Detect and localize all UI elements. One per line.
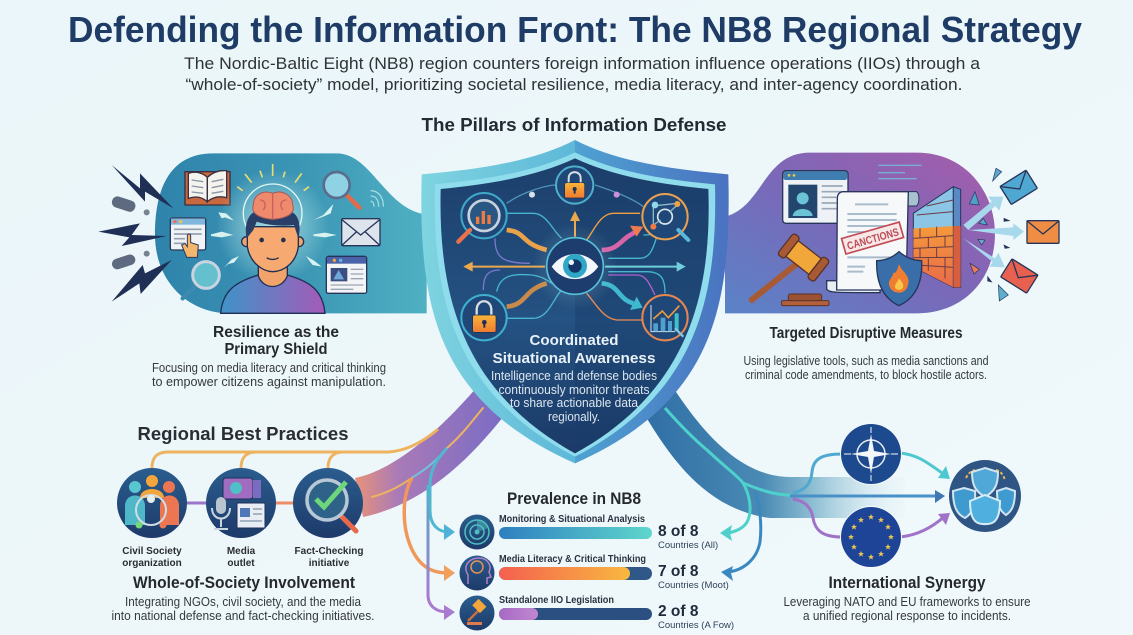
whole of society description: into national defense and fact-checking initiatives. xyxy=(112,608,374,623)
bar: monitoring: Monitoring & Situational Analysis xyxy=(499,514,645,525)
icon: person with brain xyxy=(221,192,325,313)
icon: NATO xyxy=(840,423,902,485)
icon: glowing halo and rays xyxy=(216,164,329,283)
icon: blue envelope xyxy=(1000,170,1037,205)
bar: media literacy: Media Literacy & Critical Thinking xyxy=(499,554,646,565)
icon: top padlock xyxy=(556,166,593,204)
icon: magnifier right xyxy=(324,172,359,208)
bar: media literacy: 7 of 8 xyxy=(658,563,699,580)
icon: red envelope xyxy=(1001,259,1038,293)
icon: flame shield xyxy=(877,252,922,306)
international synergy description xyxy=(784,594,1030,623)
heading: regional best practices: Regional Best Practices xyxy=(138,423,348,444)
labels: organisations: Fact-Checking xyxy=(295,546,363,557)
labels: organisations: Media xyxy=(227,546,256,557)
resilience description: Focusing on media literacy and critical thinking xyxy=(152,360,386,375)
title: Defending the Information Front: The NB8 Regional Strategy xyxy=(68,9,1082,50)
bar: media literacy xyxy=(460,554,729,591)
labels: organisations: Civil Society xyxy=(122,546,182,557)
bar: legislation: Countries (A Fow) xyxy=(658,620,734,631)
shield heading xyxy=(492,332,656,367)
heading: resilience xyxy=(213,324,339,358)
icon: gavel xyxy=(752,233,830,306)
bar: legislation: 2 of 8 xyxy=(658,603,699,620)
intro text: The Nordic-Baltic Eight (NB8) region counters foreign information influence operations (IIOs) through a xyxy=(184,55,981,73)
bar: legislation: Standalone IIO Legislation xyxy=(499,595,614,606)
circle: media outlet xyxy=(206,468,276,538)
heading: prevalence: Prevalence in NB8 xyxy=(507,489,641,508)
heading: pillars: The Pillars of Information Defense xyxy=(422,115,726,135)
icon: sanctions scroll xyxy=(827,192,919,293)
targeted measures description xyxy=(744,353,988,382)
panel: resilience illustration xyxy=(98,153,427,313)
shield heading: Situational Awareness xyxy=(492,350,656,367)
chart: prevalence in NB8 xyxy=(460,514,734,631)
icon: EU xyxy=(840,506,902,568)
resilience description: to empower citizens against manipulation. xyxy=(152,374,386,389)
icon: network search xyxy=(642,194,688,240)
shield: coordinated situational awareness xyxy=(421,140,729,463)
bar: monitoring xyxy=(460,514,718,551)
international synergy description: Leveraging NATO and EU frameworks to ensure xyxy=(784,594,1030,609)
shield description: to share actionable data xyxy=(510,396,638,410)
icon: profile browser xyxy=(783,171,848,223)
icon: envelope xyxy=(342,219,380,246)
arrows in network xyxy=(463,211,686,310)
shards xyxy=(969,168,1009,301)
labels: organisations: outlet xyxy=(227,558,255,569)
shield heading: Coordinated xyxy=(530,332,618,349)
icon: magnifier left xyxy=(183,262,219,298)
arrows around head xyxy=(211,204,337,267)
shield description: Intelligence and defense bodies xyxy=(491,369,657,383)
network lines xyxy=(483,185,665,320)
ribbon: left band to best practices xyxy=(355,387,503,517)
shield description: continuously monitor threats xyxy=(498,383,650,397)
targeted measures description: Using legislative tools, such as media sanctions and xyxy=(744,353,988,368)
icon: analysis magnifier xyxy=(458,193,507,242)
heading: international synergy: International Synergy xyxy=(828,574,986,592)
labels: organisations: initiative xyxy=(309,558,350,569)
decorative list lines xyxy=(878,165,922,179)
heading: resilience: Primary Shield xyxy=(224,341,328,358)
arrows: blocked messages xyxy=(963,197,1024,267)
bar: legislation xyxy=(460,595,734,631)
connectors: best practices xyxy=(152,408,483,503)
whole of society description: Integrating NGOs, civil society, and the media xyxy=(125,594,362,609)
intro text: “whole-of-society” model, prioritizing societal resilience, media literacy, and inter-agency coordination. xyxy=(186,76,962,94)
labels: organisations: organization xyxy=(122,558,182,569)
icon: wifi signal xyxy=(371,191,383,207)
icon: allied shields xyxy=(949,460,1021,532)
stamp text: CANCTIONS xyxy=(846,226,900,253)
intro text xyxy=(184,55,981,94)
heading: whole of society: Whole-of-Society Involvement xyxy=(133,574,355,592)
connectors: to prevalence chart xyxy=(404,408,761,620)
shield description: regionally. xyxy=(548,410,600,424)
circle: civil society xyxy=(117,468,187,538)
international synergy description: a unified regional response to incidents. xyxy=(803,608,1011,623)
labels: organisations xyxy=(122,546,363,569)
heading: resilience: Resilience as the xyxy=(213,324,339,341)
icon: central eye xyxy=(532,223,618,310)
icon: trend chart xyxy=(642,295,688,340)
targeted measures description: criminal code amendments, to block hostile actors. xyxy=(745,367,987,382)
icon: side padlock xyxy=(461,295,507,340)
icon: brick firewall xyxy=(913,187,961,287)
shield description xyxy=(491,369,657,424)
heading: targeted measures: Targeted Disruptive Measures xyxy=(770,325,963,342)
icon: browser window xyxy=(326,256,367,293)
bar: monitoring: 8 of 8 xyxy=(658,523,699,540)
icon: attack bolts xyxy=(98,165,173,302)
bar: media literacy: Countries (Moot) xyxy=(658,580,729,591)
icon: open book xyxy=(185,171,230,205)
ribbon: right band to international synergy xyxy=(646,389,905,518)
bar: monitoring: Countries (All) xyxy=(658,540,718,551)
whole of society description xyxy=(112,594,374,623)
resilience description xyxy=(152,360,386,389)
panel: targeted disruptive measures illustration xyxy=(725,153,1059,313)
circle: fact-checking xyxy=(293,468,363,538)
icon: orange envelope xyxy=(1027,221,1059,243)
icon: browser with hand xyxy=(170,218,206,257)
connectors: international synergy xyxy=(743,453,950,537)
